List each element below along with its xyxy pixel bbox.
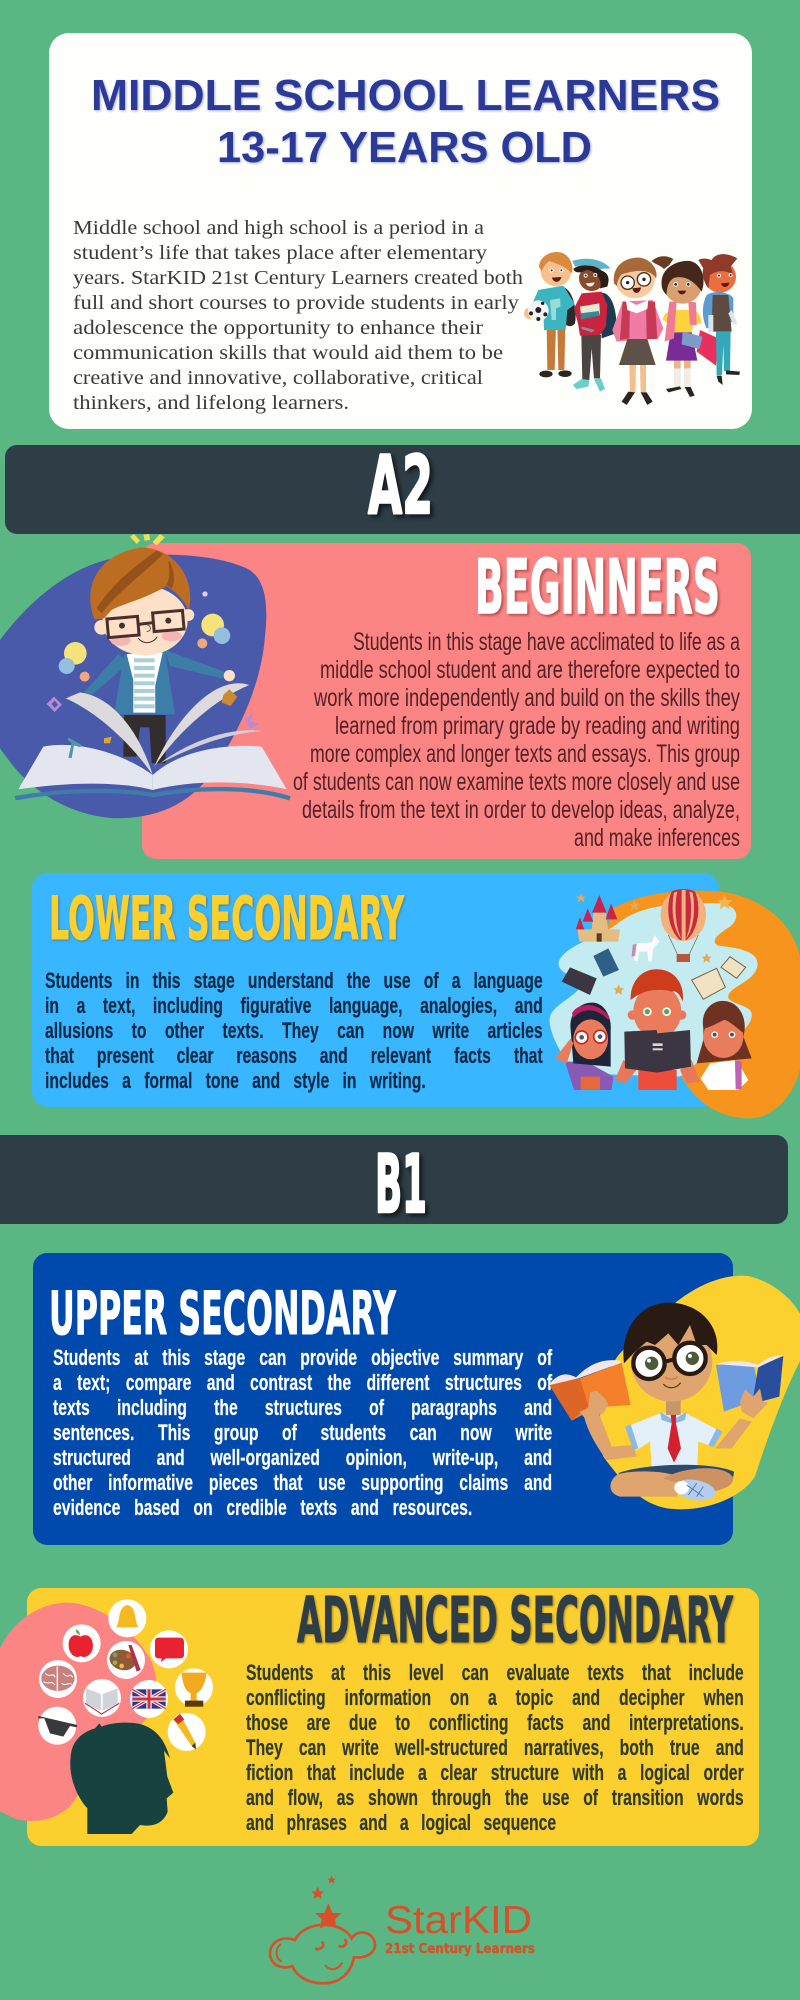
intro text: Middle school and high school is a period in a [73,217,484,239]
advanced secondary text: fiction that include a clear structure with a logical order [246,1760,744,1785]
intro text: full and short courses to provide students in early [73,292,520,314]
advanced secondary text: those are due to conflicting facts and interpretations. [246,1710,744,1735]
intro text: creative and innovative, collaborative, critical [73,367,483,389]
icon: open book [85,1688,119,1714]
upper secondary text: texts including the structures of paragraphs and [53,1395,552,1420]
intro text: student’s life that takes place after elementary [73,242,488,264]
advanced secondary text: They can write well-structured narratives, both true and [246,1735,744,1760]
icon: trophy [182,1673,207,1707]
lower secondary text: includes a formal tone and style in writing. [45,1068,426,1093]
section bar: A2: A2 [368,439,433,532]
intro text: thinkers, and lifelong learners. [73,392,349,414]
icon: brain [41,1666,75,1691]
illustration: boy holding two books [549,1276,800,1509]
intro text: adolescence the opportunity to enhance their [73,317,483,339]
icon: palette [107,1645,141,1673]
section bar: B1: B1 [375,1138,427,1231]
upper secondary text [53,1345,555,1525]
intro text: years. StarKID 21st Century Learners created both [73,267,523,289]
icon: speech bubble [155,1638,184,1662]
illustration: head with learning icons [0,1599,213,1834]
advanced secondary text [246,1660,748,1840]
head silhouette [70,1723,173,1834]
panel: lower secondary [32,873,800,1118]
panel: upper secondary [33,1253,800,1545]
section bar: B1 [0,1135,788,1231]
upper secondary text: structured and well-organized opinion, write-up, and [53,1445,552,1470]
section bar: A2 [5,439,800,534]
beginners text [293,628,740,852]
advanced secondary text: and flow, as shown through the use of transition words [246,1785,744,1810]
upper secondary text: evidence based on credible texts and resources. [53,1495,472,1520]
lower secondary text: allusions to other texts. They can now write articles [45,1018,543,1043]
logo name: StarKID [385,1899,532,1942]
advanced secondary text: and phrases and a logical sequence [246,1810,556,1835]
illustration: group of students [524,252,740,405]
lower secondary text: Students in this stage understand the use of a language [45,968,543,993]
lower secondary text: in a text, including figurative language, analogies, and [45,993,543,1018]
upper secondary text: other informative pieces that use supporting claims and [53,1470,552,1495]
icon: bell [116,1605,139,1627]
upper secondary text: a text; compare and contrast the different structures of [53,1370,552,1395]
icon: graduation cap [38,1716,77,1737]
icon: pencil [173,1714,196,1749]
illustration: boy with open book [0,534,290,818]
upper secondary text: Students at this stage can provide objective summary of [53,1345,552,1370]
lower secondary text: that present clear reasons and relevant facts that [45,1043,543,1068]
panel: beginners [0,534,751,859]
title [91,71,720,172]
panel: advanced secondary [0,1584,759,1846]
beginners text: and make inferences [574,824,740,852]
lower secondary text [45,968,545,1098]
logo mark [270,1876,375,1983]
logo: StarKID [270,1876,535,1983]
icon: apple [69,1635,93,1657]
heading: lower secondary: LOWER SECONDARY [49,884,405,954]
logo tagline: 21st Century Learners [385,1942,535,1957]
panel: introduction [49,33,752,429]
intro text [73,217,523,414]
title: MIDDLE SCHOOL LEARNERS [91,71,720,120]
heading: upper secondary: UPPER SECONDARY [49,1279,397,1349]
icon: UK flag [132,1689,166,1709]
advanced secondary text: Students at this level can evaluate texts that include [246,1660,744,1685]
title: 13-17 YEARS OLD [217,123,592,172]
intro text: communication skills that would aid them to be [73,342,503,364]
upper secondary text: sentences. This group of students can now write [53,1420,552,1445]
advanced secondary text: conflicting information on a topic and decipher when [246,1685,744,1710]
illustration: children reading [550,889,800,1118]
